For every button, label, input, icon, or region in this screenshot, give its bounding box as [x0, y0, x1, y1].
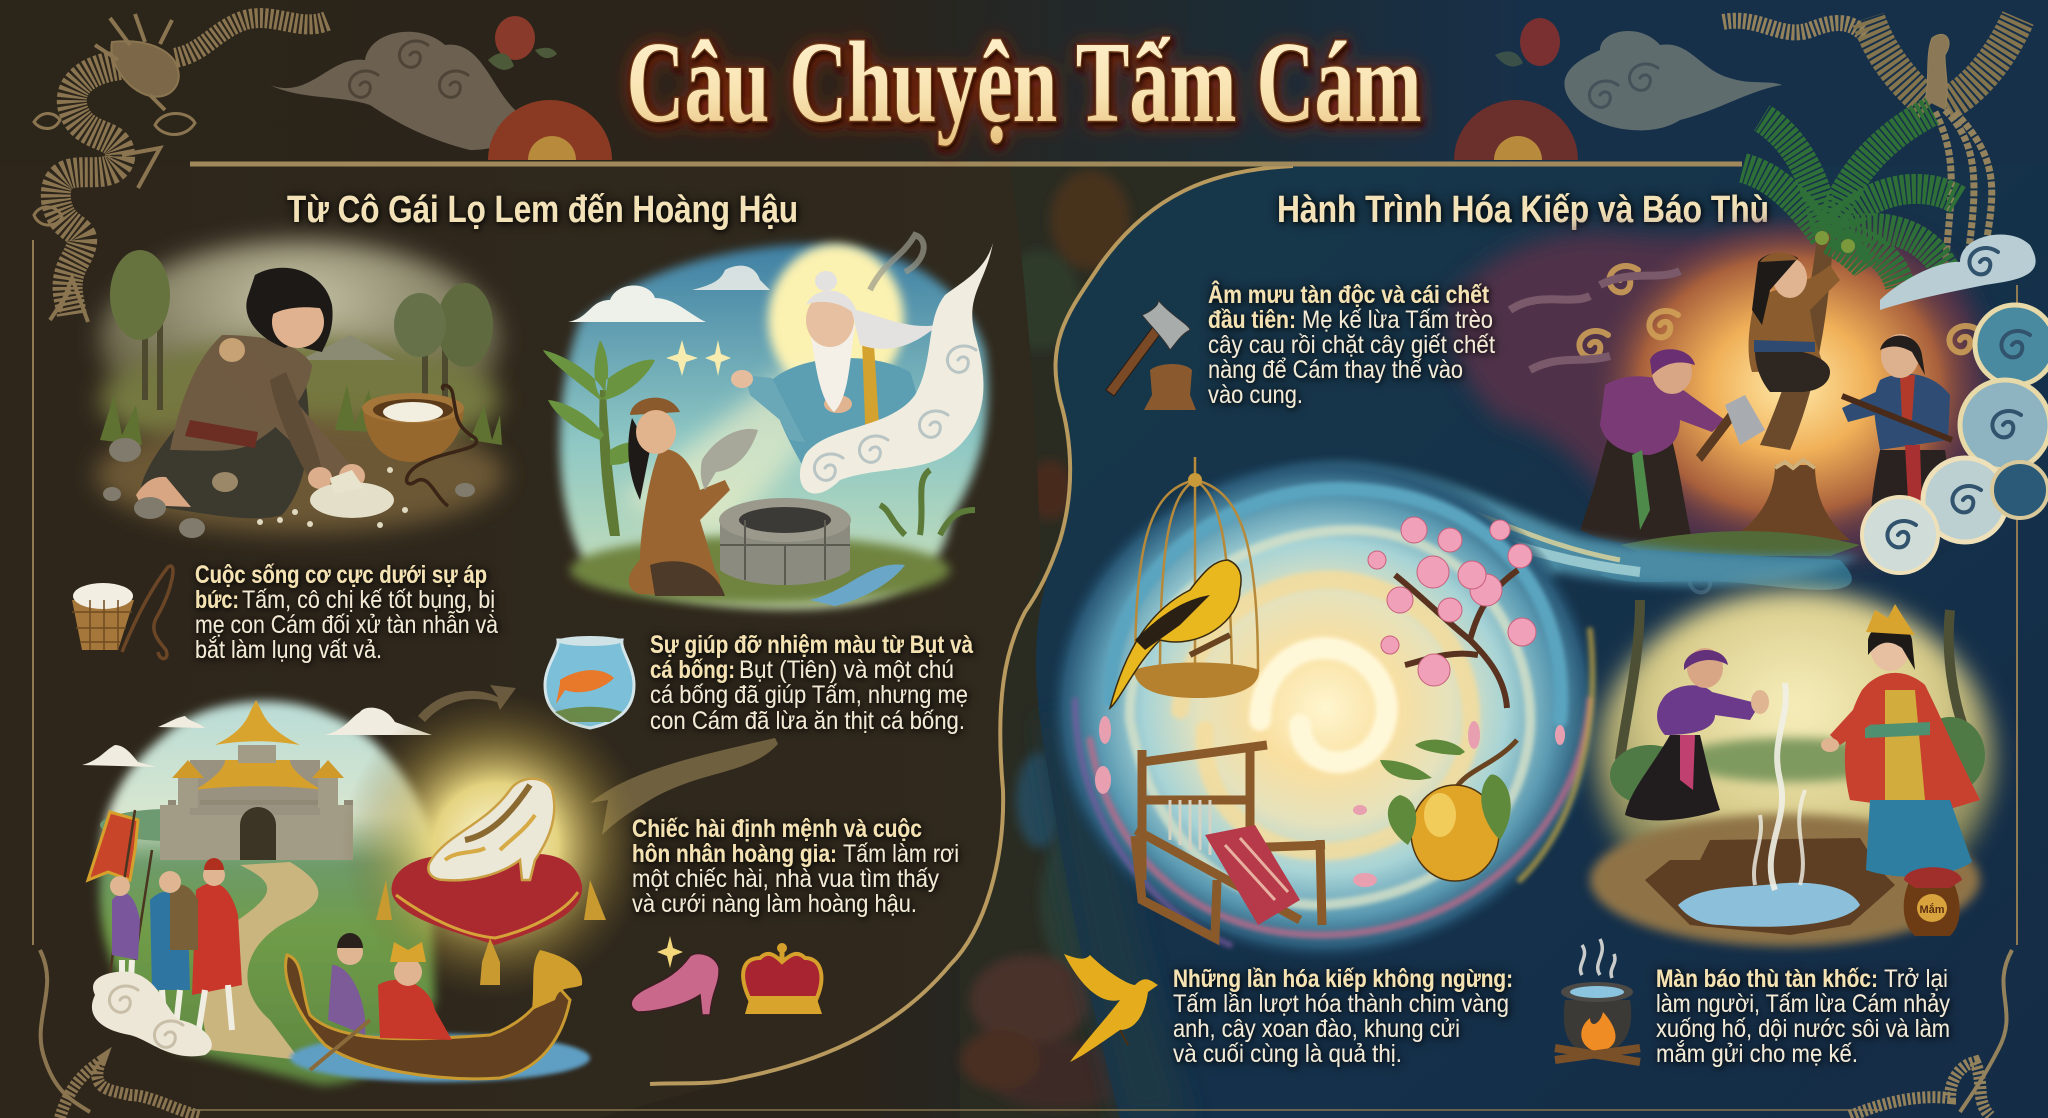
- plant: banana leaves: [543, 340, 975, 536]
- text: first death: vào cung.: [1208, 381, 1303, 409]
- object: glass slipper: [428, 779, 554, 880]
- text: hardship: bắt làm lụng vất vả.: [195, 635, 382, 664]
- figure: Cám with axe: [1842, 334, 1952, 540]
- text: first death: Mẹ kế lừa Tấm trèo: [1302, 306, 1493, 334]
- text: magical help: cá bống đã giúp Tấm, nhưng mẹ: [650, 681, 968, 709]
- text: first death: [1208, 279, 1495, 409]
- plant: palm tree: [1743, 111, 1958, 450]
- title: Câu Chuyện Tấm Cám: [626, 19, 1422, 147]
- figures: procession: [88, 810, 242, 1035]
- panel: left brown background: [0, 166, 1293, 1118]
- text: destined shoe: hôn nhân hoàng gia:: [632, 840, 837, 868]
- figure: stepmother with axe: [1580, 349, 1765, 545]
- icon: boiling pot on fire: [1555, 939, 1640, 1062]
- illustration: palm tree murder scene: [1447, 111, 2048, 592]
- arrow: to shoe: [590, 738, 778, 835]
- text: first death: cây cau rồi chặt cây giết chết: [1208, 331, 1495, 359]
- illustration: palace and royal procession: [82, 700, 435, 1085]
- figure: Tấm climbing: [1749, 253, 1840, 392]
- text: destined shoe: [632, 815, 959, 918]
- illustration: glowing shoe on pillow: [341, 690, 651, 1000]
- text: magical help: [650, 631, 973, 735]
- object: stone well: [719, 498, 905, 606]
- icon: crown: [743, 943, 822, 1014]
- swirl: glowing vortex: [1047, 454, 1603, 962]
- icon: golden bird: [1064, 954, 1158, 1062]
- text: first death: Âm mưu tàn độc và cái chết: [1208, 279, 1490, 309]
- object: red pillow: [376, 854, 606, 985]
- object: golden fruit: [1380, 740, 1517, 881]
- illustration: royal dragon boat: [286, 933, 590, 1082]
- heading: left section: Từ Cô Gái Lọ Lem đến Hoàng Hậu: [287, 189, 798, 231]
- text: brutal revenge: mắm gửi cho mẹ kế.: [1656, 1039, 1858, 1068]
- ornament: top-left dragon: [34, 14, 327, 322]
- wave: river into the scene: [1155, 464, 1860, 640]
- text: brutal revenge: xuống hố, dội nước sôi và làm: [1656, 1015, 1950, 1043]
- cloud: swirl cloud bottom-left: [92, 972, 212, 1056]
- object: cut trunk stump: [1620, 460, 1860, 556]
- text: hardship: bức:: [195, 586, 239, 614]
- illustration: Tấm picking rice: [95, 240, 505, 538]
- text: magical help: Sự giúp đỡ nhiệm màu từ Bụt và: [650, 631, 973, 659]
- ornament: bottom-right phoenix: [1850, 950, 2012, 1116]
- arrow: to fish bowl: [418, 685, 516, 722]
- text: destined shoe: một chiếc hài, nhà vua tìm thấy: [632, 865, 939, 893]
- text: brutal revenge: làm người, Tấm lừa Cám nhảy: [1656, 990, 1950, 1018]
- object: spilled rice: [103, 438, 475, 538]
- text: endless transformations: và cuối cùng là quả thị.: [1173, 1040, 1402, 1068]
- icon: rice basket and whip: [72, 566, 173, 659]
- text: hardship: Tấm, cô chị kế tốt bụng, bị: [242, 586, 495, 614]
- clouds: swirling cloud stack on right: [1600, 234, 2048, 592]
- text: brutal revenge: Màn báo thù tàn khốc:: [1656, 965, 1878, 993]
- building: palace: [160, 700, 353, 860]
- text: endless transformations: Tấm lần lượt hóa thành chim vàng: [1173, 990, 1509, 1018]
- text: destined shoe: Tấm làm rơi: [843, 840, 959, 868]
- text: magical help: cá bống:: [650, 656, 735, 684]
- text: first death: nàng để Cám thay thế vào: [1208, 356, 1463, 384]
- ornament: top-right cloud and flowers: [1454, 18, 1782, 160]
- text: hardship: mẹ con Cám đối xử tàn nhẫn và: [195, 610, 498, 639]
- text: destined shoe: và cưới nàng làm hoàng hậu.: [632, 890, 917, 918]
- object: rice basket: [362, 385, 477, 506]
- figure: Bụt the immortal: [731, 271, 938, 470]
- object: weaving loom: [1135, 745, 1325, 938]
- text: endless transformations: anh, cây xoan đào, khung cửi: [1173, 1015, 1460, 1043]
- object: jar of mắm: Mắm: [1919, 903, 1945, 916]
- text: endless transformations: Những lần hóa kiếp không ngừng:: [1173, 965, 1513, 993]
- cloud: swirling cloud beneath Bụt: [800, 235, 993, 494]
- cloud: small clouds: [568, 266, 770, 376]
- panel: floral strip between the two halves: [960, 166, 1260, 1118]
- text: magical help: Bụt (Tiên) và một chú: [739, 656, 954, 684]
- text: brutal revenge: [1656, 965, 1950, 1068]
- figure: girl with fish: [628, 398, 758, 596]
- illustration: transformation swirl: [1047, 454, 1860, 962]
- text: first death: đầu tiên:: [1208, 306, 1296, 334]
- text: endless transformations: [1173, 965, 1513, 1068]
- figure: kneeling girl: [136, 268, 365, 518]
- cloud: palace sky clouds: [82, 708, 432, 767]
- icon: fish bowl: [545, 636, 634, 728]
- text: hardship: [195, 561, 498, 664]
- text: hardship: Cuộc sống cơ cực dưới sự áp: [195, 561, 487, 589]
- text: destined shoe: Chiếc hài định mệnh và cuộc: [632, 815, 922, 843]
- heading: right section: Hành Trình Hóa Kiếp và Báo Thù: [1277, 189, 1769, 231]
- illustration: revenge at the pit: [1590, 590, 1995, 946]
- object: birdcage with yellow bird: [1110, 457, 1259, 708]
- plant: peach blossom branch: [1368, 517, 1536, 708]
- icon: pink shoe: [631, 936, 719, 1015]
- object: pit with boiling water: [1645, 683, 1895, 935]
- text: brutal revenge: Trở lại: [1884, 965, 1948, 993]
- figure: Cám: [1625, 648, 1769, 820]
- ornament: bottom-left phoenix: [40, 950, 200, 1118]
- object: jar of mắm: [1904, 867, 1962, 936]
- figure: Queen Tấm: [1821, 604, 1980, 877]
- icon: axe and stump: [1106, 300, 1196, 410]
- illustration: Bụt and the fish at the well: [543, 235, 993, 609]
- panel: right navy background: [1036, 166, 2048, 1118]
- text: magical help: con Cám đã lừa ăn thịt cá bống.: [650, 707, 965, 735]
- ornament: top-right phoenix: [1723, 18, 2018, 280]
- ornament: top-left cloud and flowers: [270, 16, 612, 160]
